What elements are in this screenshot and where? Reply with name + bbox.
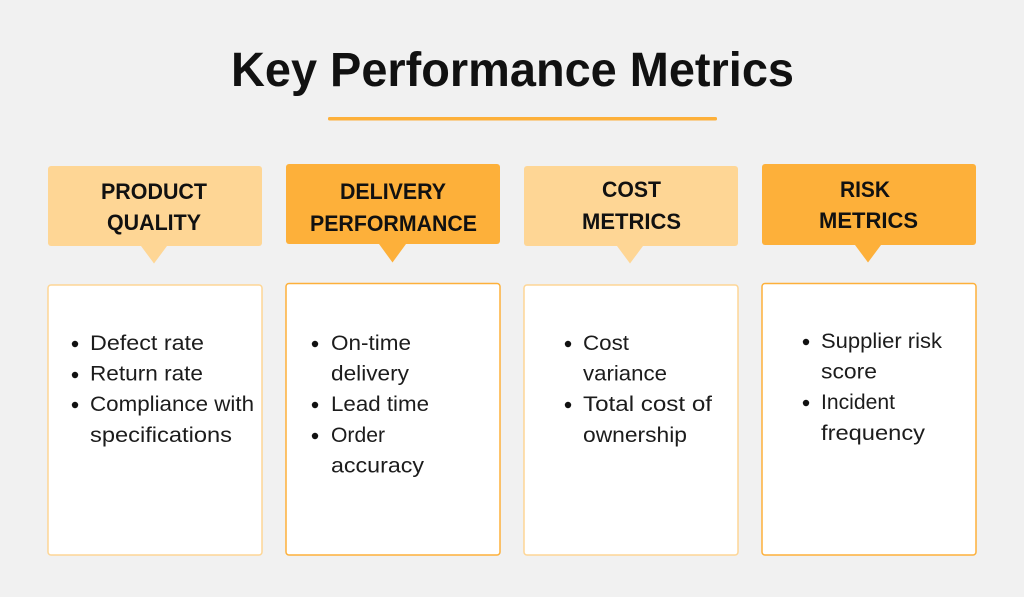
header: risk metrics <box>762 164 976 262</box>
card: product quality list: specifications <box>90 423 232 447</box>
panel: product quality <box>48 166 262 555</box>
card: delivery performance list <box>286 284 500 555</box>
card: cost metrics list: Cost <box>583 331 629 355</box>
card: risk metrics list: Supplier risk <box>821 329 942 353</box>
card: cost metrics list: ownership <box>583 423 687 447</box>
card: risk metrics list: Incident <box>821 390 895 414</box>
card: product quality list: Compliance with <box>90 392 254 416</box>
card: cost metrics list: Total cost of <box>583 392 712 416</box>
panel: risk metrics <box>762 164 976 555</box>
header: delivery performance <box>286 164 500 262</box>
card: risk metrics list <box>762 284 976 555</box>
card: delivery performance list: Order <box>331 423 385 447</box>
card: cost metrics list <box>524 285 738 555</box>
header: cost metrics: COST <box>602 177 661 202</box>
card: risk metrics list: frequency <box>821 421 925 445</box>
header: product quality <box>48 166 262 264</box>
card: cost metrics list: variance <box>583 362 667 386</box>
header: cost metrics: METRICS <box>582 209 681 234</box>
card: delivery performance list: delivery <box>331 362 409 386</box>
header: risk metrics: RISK <box>840 177 891 202</box>
panel: delivery performance <box>286 164 500 555</box>
card: delivery performance list: accuracy <box>331 454 424 478</box>
card: product quality list <box>48 285 262 555</box>
card: delivery performance list: Lead time <box>331 392 429 416</box>
card: product quality list: Defect rate <box>90 331 204 355</box>
card: product quality list: Return rate <box>90 362 203 386</box>
header: delivery performance: DELIVERY <box>340 179 446 204</box>
header: delivery performance: PERFORMANCE <box>310 211 477 236</box>
title: Key Performance Metrics <box>231 44 794 97</box>
panel: cost metrics <box>524 166 738 555</box>
header: risk metrics: METRICS <box>819 208 918 233</box>
header: cost metrics <box>524 166 738 264</box>
card: delivery performance list: On-time <box>331 331 411 355</box>
header: product quality: PRODUCT <box>101 179 207 204</box>
header: product quality: QUALITY <box>107 210 201 235</box>
card: risk metrics list: score <box>821 360 877 384</box>
